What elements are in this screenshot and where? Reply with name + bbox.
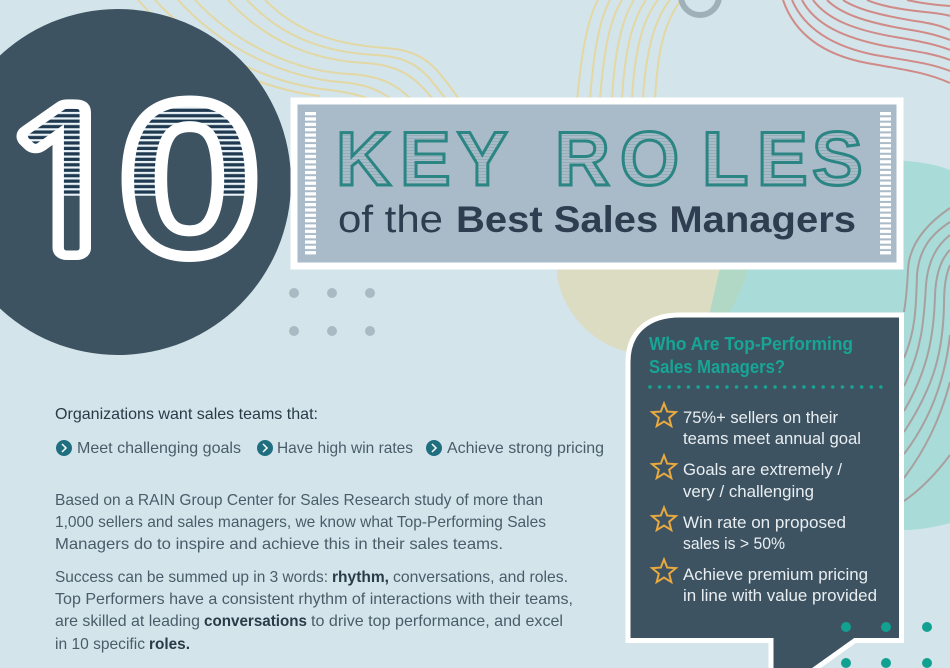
panel heading: Who Are Top-Performing (649, 334, 853, 354)
paragraph 2: are skilled at leading (55, 613, 200, 630)
bullet list: goals: Meet challenging goals (77, 440, 241, 457)
paragraph 2: conversations (204, 613, 307, 630)
title banner: KEY ROLES (336, 117, 863, 202)
paragraph 2: Success can be summed up in 3 words: (55, 569, 328, 586)
intro line: Organizations want sales teams that: (55, 406, 318, 423)
paragraph 2: rhythm, (332, 569, 389, 586)
item: challenging goals: very / challenging (683, 483, 814, 501)
bullet list: goals: Have high win rates (277, 440, 413, 457)
paragraph 1: Based on a RAIN Group Center for Sales Research study of more than (55, 492, 543, 509)
paragraph 1: 1,000 sellers and sales managers, we know what Top-Performing Sales (55, 514, 546, 531)
dotted divider (650, 385, 881, 389)
item: annual goal: 75%+ sellers on their (683, 409, 839, 427)
bullet list: goals (56, 440, 604, 457)
item: annual goal: teams meet annual goal (683, 430, 861, 448)
wavy lines: red top right (783, 0, 950, 83)
item: annual goal (652, 404, 861, 448)
wavy lines: yellow left (138, 0, 460, 100)
paragraph 1 (55, 492, 546, 553)
ring decoration (681, 0, 719, 15)
item: premium pricing (652, 560, 877, 605)
panel heading (649, 334, 853, 377)
background blob: teal (700, 160, 950, 530)
paragraph 2: to drive top performance, and excel (311, 613, 563, 630)
grey dots (289, 288, 375, 336)
wavy lines: yellow right (577, 0, 681, 100)
big circle with number 10 (0, 9, 291, 355)
item: challenging goals: Goals are extremely / (683, 461, 842, 479)
title banner (294, 101, 900, 266)
wavy lines: right side (904, 208, 950, 501)
panel heading: Sales Managers? (649, 357, 785, 377)
title banner: of the (338, 199, 443, 241)
item: premium pricing: in line with value provided (683, 587, 877, 605)
paragraph 1: Managers do to inspire and achieve this in their sales teams. (55, 536, 503, 553)
paragraph 2: in 10 specific (55, 636, 145, 653)
big circle with number 10: 0 (125, 65, 254, 293)
background blob: overlap (710, 270, 748, 312)
paragraph 2: roles. (149, 636, 190, 653)
item: win rate: Win rate on proposed (683, 514, 846, 532)
item: challenging goals (652, 456, 842, 501)
paragraph 2: conversations, and roles. (393, 569, 568, 586)
callout panel (628, 315, 902, 668)
teal dots (841, 622, 932, 668)
item: win rate: sales is > 50% (683, 535, 785, 553)
paragraph 2 (55, 569, 573, 653)
paragraph 2: Top Performers have a consistent rhythm of interactions with their teams, (55, 591, 573, 608)
item: win rate (652, 508, 846, 553)
bullet list: goals: Achieve strong pricing (447, 440, 604, 457)
item: premium pricing: Achieve premium pricing (683, 566, 868, 584)
title banner: Best Sales Managers (456, 199, 856, 240)
background blob: olive (557, 200, 750, 356)
